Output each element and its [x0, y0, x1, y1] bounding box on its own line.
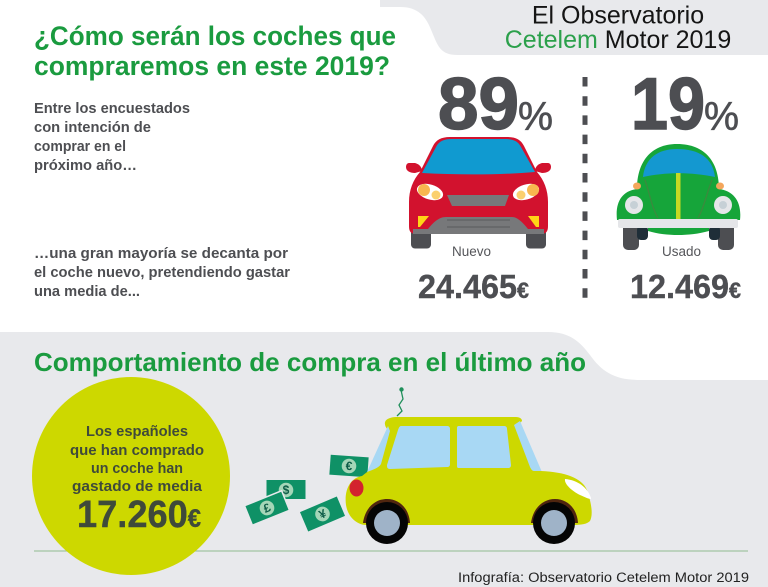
text block: new car majority: …una gran mayoría se decanta por [34, 246, 288, 262]
icon: red new car [406, 137, 551, 248]
banknote: pound: £ [261, 500, 273, 516]
title: compraremos en este 2019? [34, 51, 390, 81]
text block: survey intro: con intención de [34, 120, 151, 136]
source credit: Infografía: Observatorio Cetelem Motor 2019 [458, 570, 749, 585]
banknote: yen: ¥ [317, 506, 329, 522]
heading: purchase behaviour: Comportamiento de compra en el último año [34, 347, 586, 377]
ground line [34, 550, 748, 552]
price: new car: 24.465€ [418, 268, 529, 305]
label: Nuevo: Nuevo [452, 244, 491, 259]
banknote: euro: € [345, 459, 353, 473]
text block: survey intro: comprar en el [34, 139, 126, 155]
title: ¿Cómo serán los coches que [34, 21, 396, 51]
banknote: dollar: $ [283, 483, 290, 497]
label: Usado: Usado [662, 244, 701, 259]
icon: green used car [617, 144, 740, 250]
stat: 89% new cars: % [518, 95, 553, 139]
header: observatory name: Cetelem Motor 2019 [505, 26, 731, 54]
icon: falling banknotes [245, 455, 369, 531]
price: used car: 12.469€ [630, 268, 741, 305]
panel: bottom section background [0, 332, 768, 587]
stat: 19% used cars: 19 [631, 64, 705, 145]
panel: top header background [380, 0, 768, 55]
callout: average spend circle: que han comprado [70, 443, 204, 459]
stat: 19% used cars: % [704, 95, 739, 139]
header: observatory name: El Observatorio [532, 2, 704, 30]
text block: new car majority [34, 246, 290, 300]
icon: yellow-green car [346, 387, 592, 544]
text block: survey intro: Entre los encuestados [34, 101, 190, 117]
text block: survey intro [34, 101, 190, 174]
header: observatory name [505, 2, 731, 54]
callout: average spend circle: 17.260€ [77, 494, 201, 536]
stat: 89% new cars: 89 [438, 64, 519, 145]
title [34, 21, 396, 81]
callout: average spend circle: Los españoles [86, 424, 188, 440]
text block: new car majority: una media de... [34, 284, 140, 300]
text block: survey intro: próximo año… [34, 158, 137, 174]
callout: average spend circle [32, 377, 230, 575]
callout: average spend circle: gastado de media [72, 479, 203, 495]
divider: dashed line between new and used [582, 77, 588, 298]
text block: new car majority: el coche nuevo, pretendiendo gastar [34, 265, 290, 281]
callout: average spend circle: un coche han [91, 461, 183, 477]
